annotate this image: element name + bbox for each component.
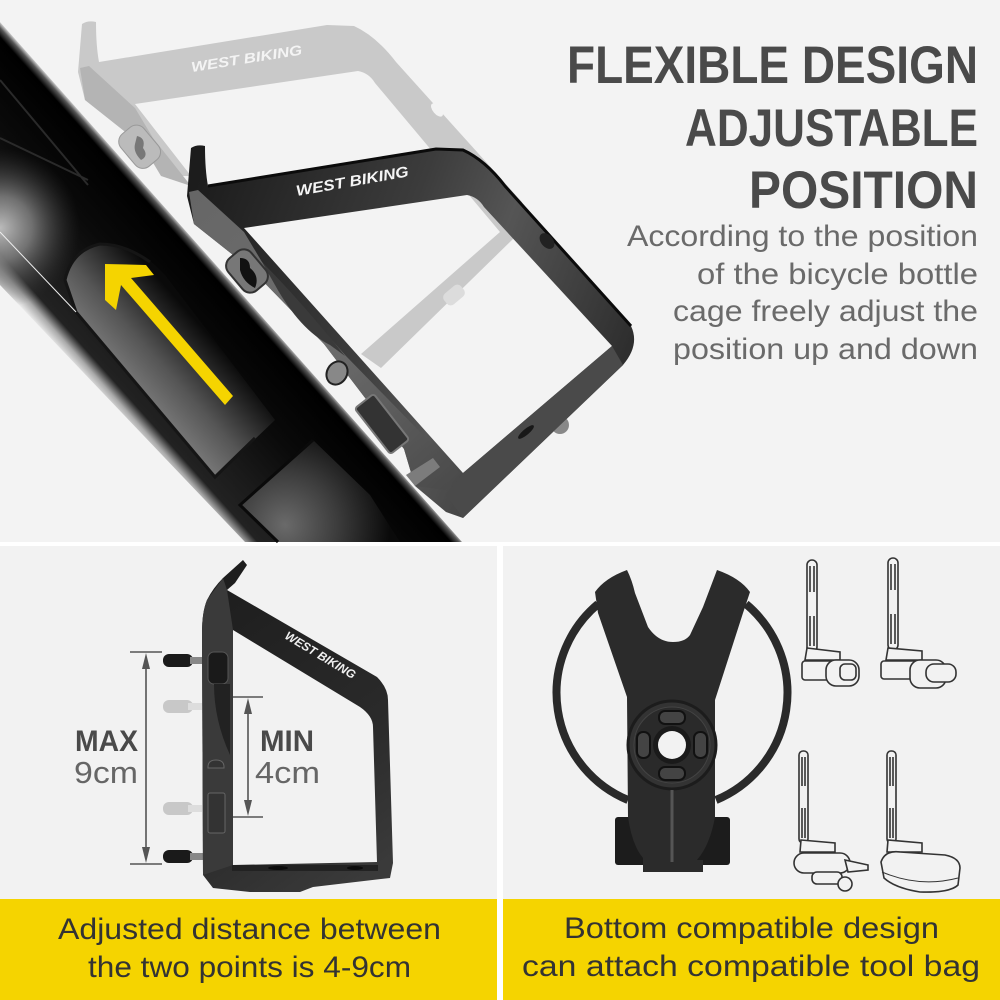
description text: cage freely adjust the (673, 295, 978, 328)
line icon: bag (881, 751, 960, 892)
cage logo: WEST BIKING (295, 163, 410, 200)
description text (627, 220, 978, 366)
min label (255, 725, 320, 790)
line icon: clamp two (881, 558, 956, 688)
caption bar left (0, 899, 497, 1000)
line icon: clamp one (802, 560, 859, 686)
heading: POSITION (749, 161, 978, 220)
min dimension arrow (233, 697, 263, 817)
side cage logo: WEST BIKING (282, 629, 358, 682)
ghost cage logo: WEST BIKING (190, 42, 303, 75)
caption bar right: Bottom compatible design (564, 912, 939, 945)
max label (74, 725, 138, 790)
max label: MAX (75, 725, 138, 758)
ghost fastener upper (163, 700, 202, 713)
side view cage (202, 560, 393, 892)
caption bar left: the two points is 4-9cm (88, 951, 411, 984)
max label: 9cm (74, 755, 138, 790)
panel: flexible design (0, 0, 1000, 542)
panel: compatible design (503, 546, 1000, 899)
caption bar left: Adjusted distance between (58, 913, 441, 946)
grip button (322, 358, 352, 388)
bicycle frame tube (0, 22, 462, 542)
yellow direction arrow (105, 264, 233, 405)
mount disc (628, 701, 716, 789)
clamps (615, 817, 730, 865)
fastener bottom (163, 850, 203, 863)
caption bar right (503, 899, 1000, 1000)
max dimension arrow (130, 652, 162, 864)
description text: position up and down (673, 333, 978, 366)
lower rib (670, 790, 674, 862)
description text: of the bicycle bottle (697, 258, 978, 291)
clip knob (222, 245, 272, 297)
description text: According to the position (627, 220, 978, 253)
panel: adjustable distance (0, 546, 497, 899)
fastener top (163, 654, 203, 667)
min label: 4cm (255, 755, 320, 790)
brand plate (355, 394, 409, 454)
ghost fastener lower (163, 802, 202, 815)
heading (567, 36, 978, 220)
min label: MIN (260, 725, 314, 758)
caption bar right: can attach compatible tool bag (522, 950, 980, 983)
line icon: canister (794, 751, 868, 891)
bottle cage (187, 145, 634, 518)
y bracket (595, 570, 750, 872)
ghost bottle cage (78, 21, 525, 368)
ring arcs (557, 604, 787, 800)
